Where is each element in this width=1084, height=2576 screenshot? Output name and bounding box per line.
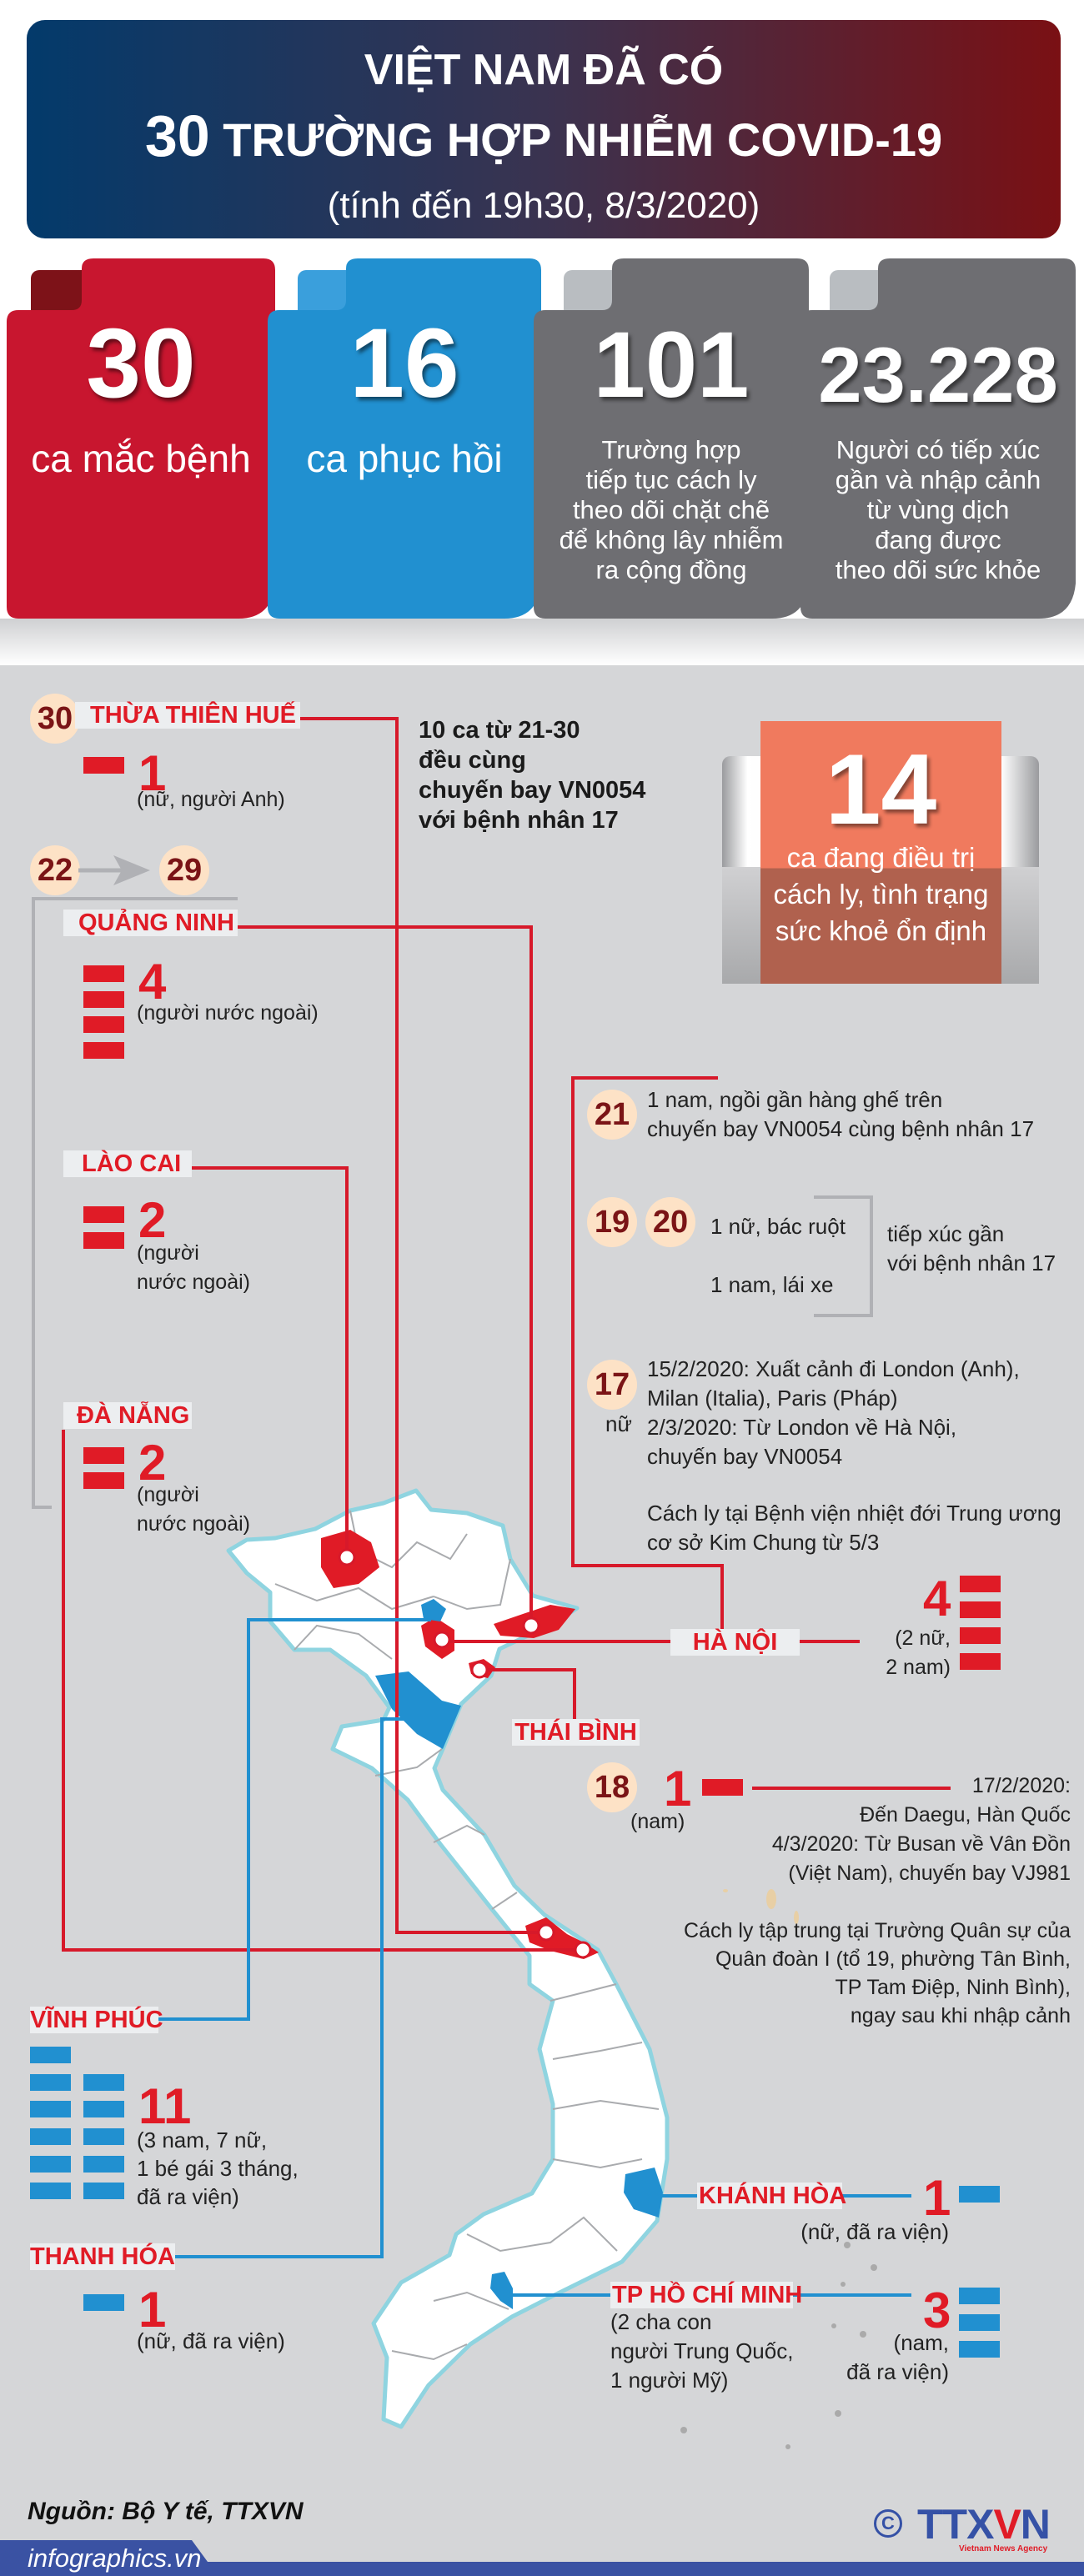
subtitle date: (tính đến 19h30, 8/3/2020) [328, 185, 760, 226]
card 3: 101: tiếp tục cách ly [585, 465, 757, 494]
Lào Cai: 2 [138, 1192, 166, 1248]
Khánh Hòa: (nữ, đã ra viện) [800, 2219, 949, 2244]
Thanh Hóa: THANH HÓA [30, 2243, 175, 2270]
Đà Nẵng: 2 [138, 1435, 166, 1491]
TP Hồ Chí Minh: (2 cha con [610, 2309, 711, 2334]
card 4: 23.228: từ vùng dịch [867, 495, 1009, 524]
title banner [27, 20, 1061, 238]
case 30 Thừa Thiên Huế: 1 [138, 745, 166, 801]
Thanh Hóa: 1 [138, 2282, 166, 2338]
source: Nguồn: Bộ Y tế, TTXVN [28, 2498, 304, 2525]
TP Hồ Chí Minh: 1 người Mỹ) [610, 2368, 728, 2393]
case 21: 1 nam, ngồi gần hàng ghế trên [647, 1087, 942, 1112]
Đà Nẵng: (người [137, 1483, 199, 1506]
TP Hồ Chí Minh [610, 2281, 1000, 2393]
card 3: 101: để không lây nhiễm [560, 525, 783, 554]
card 1: 30 cases [31, 308, 251, 480]
card 2: 16 recovered: ca phục hồi [306, 437, 503, 480]
arrow 22 to 29: 22 [38, 853, 73, 888]
stat cards [7, 258, 1076, 619]
case 18: ngay sau khi nhập cảnh [851, 2004, 1071, 2027]
map dots [339, 1550, 590, 1957]
TP Hồ Chí Minh: 3 [923, 2283, 951, 2338]
card 4: 23.228 [818, 331, 1060, 584]
Đà Nẵng [63, 1401, 250, 1536]
case 17: nữ [605, 1411, 632, 1436]
Thanh Hóa: (nữ, đã ra viện) [137, 2328, 285, 2353]
note: 10 cases same flight: đều cùng [419, 747, 526, 774]
Quảng Ninh: QUẢNG NINH [78, 910, 234, 936]
callout 14 under treatment: ca đang điều trị [787, 842, 975, 873]
case 17: chuyến bay VN0054 [647, 1444, 842, 1469]
card 4: 23.228: Người có tiếp xúc [836, 435, 1040, 464]
card 2: 16 recovered [306, 308, 503, 480]
case 17 [587, 1356, 1061, 1555]
case 18: Quân đoàn I (tổ 19, phường Tân Bình, [715, 1947, 1071, 1971]
Quảng Ninh [63, 909, 319, 1059]
Lào Cai: (người [137, 1241, 199, 1265]
Hà Nội: 2 nam) [886, 1656, 951, 1679]
case 17: 2/3/2020: Từ London về Hà Nội, [647, 1415, 956, 1440]
Khánh Hòa [697, 2170, 1000, 2244]
callout 14 under treatment [722, 721, 1039, 984]
case 17: Milan (Italia), Paris (Pháp) [647, 1386, 898, 1411]
card shadows [0, 619, 1084, 665]
card 1: 30 cases: ca mắc bệnh [31, 437, 251, 480]
case 17: cơ sở Kim Chung từ 5/3 [647, 1530, 879, 1555]
badge 30 [30, 694, 80, 744]
arrow 22 to 29: 29 [167, 853, 202, 888]
note: 10 cases same flight: chuyến bay VN0054 [419, 777, 645, 804]
Hà Nội: (2 nữ, [895, 1626, 951, 1650]
TP Hồ Chí Minh: TP HỒ CHÍ MINH [612, 2282, 802, 2308]
Khánh Hòa: KHÁNH HÒA [699, 2183, 846, 2209]
cases 19 20: 1 nữ, bác ruột [710, 1214, 846, 1239]
Vĩnh Phúc: đã ra viện) [137, 2184, 239, 2209]
card 4: 23.228: 23.228 [818, 331, 1058, 418]
card 4: 23.228: đang được [875, 525, 1001, 554]
card 3: 101 [560, 313, 783, 584]
logo TTXVN: C [881, 2513, 895, 2533]
case 17: 17 [595, 1367, 630, 1402]
Thái Bình: THÁI BÌNH [514, 1719, 637, 1746]
Khánh Hòa: 1 [923, 2170, 951, 2226]
Lào Cai [63, 1150, 250, 1294]
Hà Nội: 4 [923, 1571, 951, 1626]
case 18: TP Tam Điệp, Ninh Bình), [835, 1976, 1071, 1999]
case 18: 4/3/2020: Từ Busan về Vân Đồn [772, 1832, 1071, 1856]
title line 2: 30 TRƯỜNG HỢP NHIỄM COVID-19 [145, 103, 942, 168]
case 18: Đến Daegu, Hàn Quốc [860, 1803, 1071, 1827]
case 18: (Việt Nam), chuyến bay VJ981 [788, 1862, 1071, 1885]
case 21: 21 [595, 1097, 630, 1132]
gray background [0, 665, 1084, 2576]
card 3: 101: 101 [594, 313, 749, 417]
Vĩnh Phúc: (3 nam, 7 nữ, [137, 2127, 267, 2153]
Quảng Ninh: 4 [138, 954, 166, 1010]
footer bar: infographics.vn [28, 2543, 202, 2573]
arrow 22 to 29 [30, 845, 209, 895]
Quảng Ninh: (người nước ngoài) [137, 1001, 319, 1025]
case 18: (nam) [630, 1810, 685, 1833]
Thanh Hóa [30, 2243, 285, 2353]
callout 14 under treatment: cách ly, tình trạng [773, 879, 989, 910]
card 3: 101: theo dõi chặt chẽ [573, 495, 770, 524]
TP Hồ Chí Minh: (nam, [894, 2330, 949, 2355]
logo TTXVN: Vietnam News Agency [959, 2544, 1047, 2553]
Vĩnh Phúc: 1 bé gái 3 tháng, [137, 2156, 299, 2181]
callout 14 under treatment: 14 [826, 734, 936, 845]
case 21 [587, 1087, 1034, 1141]
case 21: chuyến bay VN0054 cùng bệnh nhân 17 [647, 1116, 1034, 1141]
Hà Nội: HÀ NỘI [693, 1629, 777, 1656]
note: 10 cases same flight: 10 ca từ 21-30 [419, 717, 580, 744]
case 30 Thừa Thiên Huế [30, 694, 300, 811]
case 18: Cách ly tập trung tại Trường Quân sự của [684, 1919, 1071, 1942]
cases 19 20: với bệnh nhân 17 [887, 1250, 1056, 1275]
cases 19 20: 20 [653, 1205, 688, 1240]
card 3: 101: ra cộng đồng [595, 555, 746, 584]
card 4: 23.228: theo dõi sức khỏe [836, 555, 1041, 584]
Vĩnh Phúc: VĨNH PHÚC [30, 2007, 163, 2033]
TP Hồ Chí Minh: người Trung Quốc, [610, 2338, 793, 2363]
case 30 Thừa Thiên Huế: (nữ, người Anh) [137, 788, 285, 811]
card 4: 23.228: gần và nhập cảnh [836, 465, 1041, 494]
case 18: 17/2/2020: [972, 1774, 1071, 1797]
case 18: 18 [595, 1770, 630, 1805]
case 18 [587, 1761, 1071, 2027]
case 17: 15/2/2020: Xuất cảnh đi London (Anh), [647, 1356, 1020, 1381]
cases 19 20 [587, 1197, 1056, 1297]
card 3: 101: Trường hợp [601, 435, 741, 464]
footer bar [0, 2540, 1084, 2576]
callout 14 under treatment: sức khoẻ ổn định [775, 915, 986, 946]
Đà Nẵng: nước ngoài) [137, 1512, 250, 1536]
card 1: 30 cases: 30 [86, 308, 196, 418]
TP Hồ Chí Minh: đã ra viện) [846, 2359, 949, 2384]
Lào Cai: nước ngoài) [137, 1270, 250, 1294]
Lào Cai: LÀO CAI [82, 1150, 181, 1177]
logo TTXVN: TTXVN [917, 2501, 1050, 2548]
case 18: 1 [664, 1761, 691, 1817]
Vĩnh Phúc [30, 2006, 299, 2209]
label Thừa Thiên Huế: THỪA THIÊN HUẾ [90, 702, 296, 729]
Đà Nẵng: ĐÀ NẴNG [77, 1402, 189, 1429]
card 2: 16 recovered: 16 [349, 308, 459, 418]
cases 19 20: tiếp xúc gần [887, 1221, 1004, 1246]
Hà Nội [670, 1571, 1001, 1679]
note: 10 cases same flight [419, 717, 645, 834]
cases 19 20: 19 [595, 1205, 630, 1240]
title line 1: VIỆT NAM ĐÃ CÓ [364, 46, 723, 94]
logo TTXVN [874, 2501, 1050, 2553]
cases 19 20: 1 nam, lái xe [710, 1272, 833, 1297]
Vĩnh Phúc: 11 [138, 2078, 191, 2134]
note: 10 cases same flight: với bệnh nhân 17 [419, 807, 619, 834]
case 17: Cách ly tại Bệnh viện nhiệt đới Trung ương [647, 1501, 1061, 1526]
badge 30: 30 [38, 701, 73, 736]
